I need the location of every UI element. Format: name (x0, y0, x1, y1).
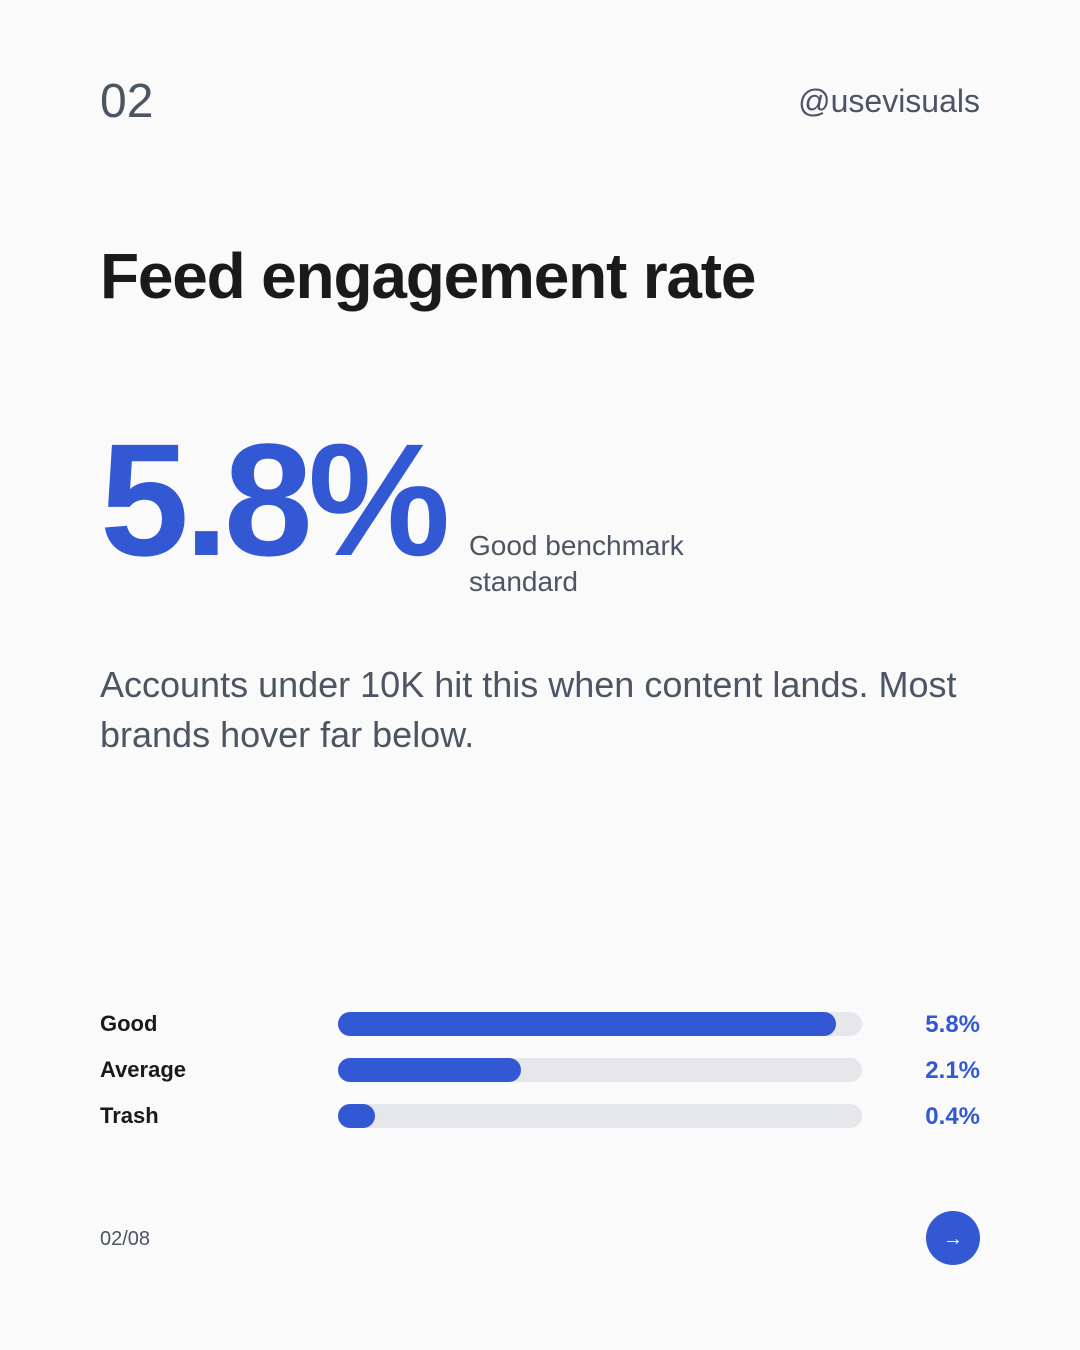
row: good: 5.8% (925, 1011, 980, 1038)
handle: @usevisuals (798, 83, 980, 119)
icon: next arrow button (926, 1211, 980, 1265)
stat caption (469, 530, 684, 597)
title: Feed engagement rate (100, 240, 755, 312)
icon: next arrow button: → (943, 1228, 963, 1250)
description: Accounts under 10K hit this when content lands. Most (100, 664, 956, 705)
pagination: 02/08 (100, 1228, 150, 1250)
row: trash: 0.4% (925, 1103, 980, 1130)
row: trash: Trash (100, 1103, 159, 1128)
stat caption: Good benchmark (469, 530, 684, 561)
description: brands hover far below. (100, 714, 474, 755)
row: good (100, 1011, 980, 1038)
big stat: 5.8% (100, 410, 446, 589)
description (100, 664, 956, 755)
row: average: 2.1% (925, 1057, 980, 1084)
page number: 02 (100, 75, 153, 128)
row: good: Good (100, 1011, 157, 1036)
row: average: Average (100, 1057, 186, 1082)
stat caption: standard (469, 566, 578, 597)
bar chart (100, 1011, 980, 1130)
